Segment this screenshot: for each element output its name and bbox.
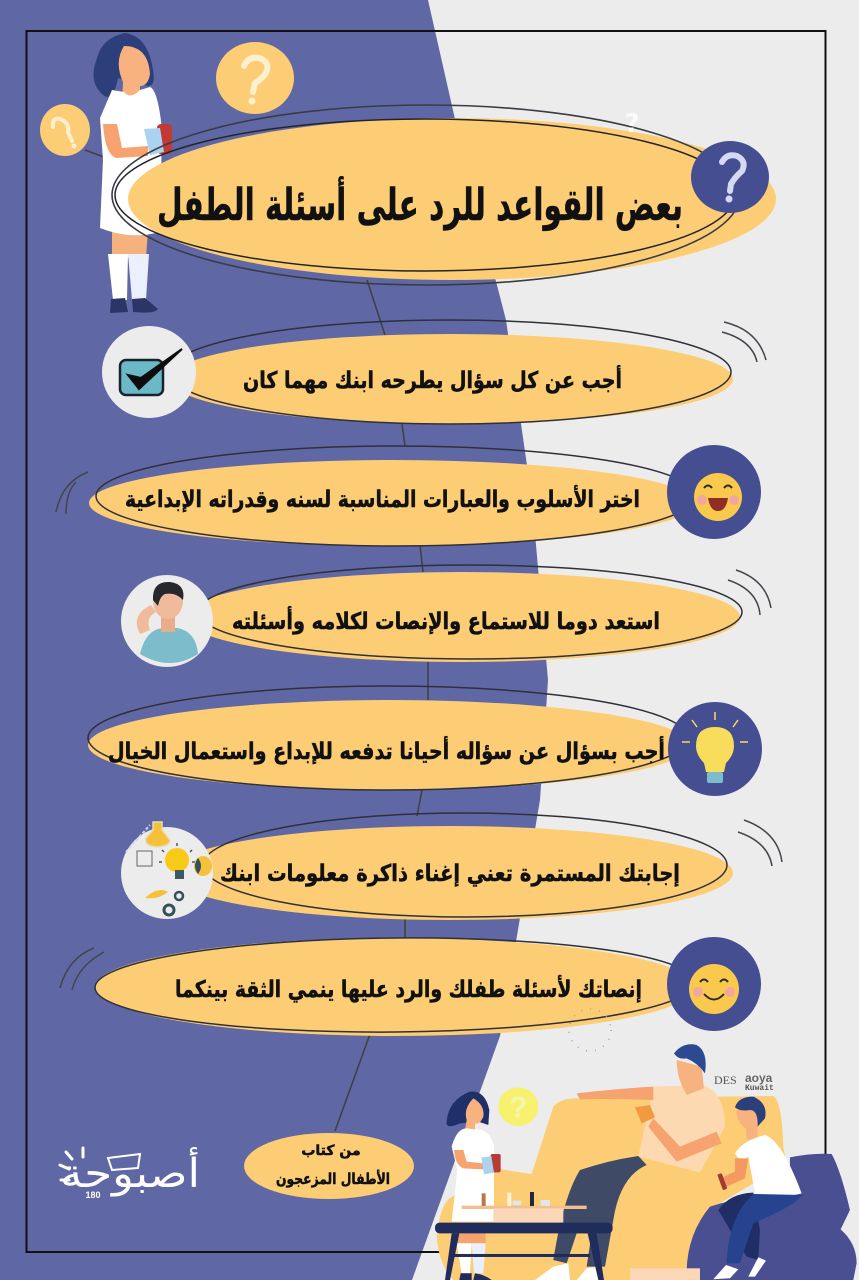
coffee table (435, 1192, 700, 1280)
rule 2 text: اختر الأسلوب والعبارات المناسبة لسنه وقدراته الإبداعية (125, 484, 640, 513)
icon: question bubble purple (691, 141, 769, 213)
sofa (437, 1096, 787, 1280)
armchair (687, 1154, 857, 1280)
source callout: من كتاب (301, 1143, 361, 1159)
source callout: الأطفال المزعجون (276, 1170, 390, 1188)
icon: smiling face (667, 937, 761, 1031)
icon: question bubble small (40, 104, 90, 156)
icon: light bulb (668, 702, 762, 796)
designer credit: Kuwait (745, 1084, 774, 1093)
designer credit: DES (714, 1073, 737, 1087)
connector lines (85, 150, 428, 1131)
rule 6 text: إنصاتك لأسئلة طفلك والرد عليها ينمي الثقة بينكما (175, 974, 642, 1003)
panel: rule 5 (121, 813, 782, 920)
logo: 180 (85, 1190, 101, 1200)
panel: rule 6 (60, 935, 761, 1036)
source callout (244, 1133, 414, 1199)
faint dotted clock (569, 1009, 611, 1051)
icon: question bubble large (216, 42, 294, 114)
illustration: family on sofa (435, 1044, 857, 1280)
rule 5 text: إجابتك المستمرة تعني إغناء ذاكرة معلومات ابنك (220, 861, 680, 887)
father (535, 1044, 725, 1280)
yellow question bubble: ? (509, 1091, 527, 1124)
illustration: standing girl (94, 33, 172, 313)
icon: checkmark (102, 326, 196, 418)
rule 4 text: أجب بسؤال عن سؤاله أحيانا تدفعه للإبداع واستعمال الخيال (108, 735, 665, 765)
icon: faint question mark: ? (624, 109, 640, 139)
title panel (112, 105, 776, 285)
designer credit: aoya (745, 1071, 773, 1085)
panel: rule 1 (102, 320, 766, 424)
panel: rule 3 (121, 565, 771, 667)
yellow question bubble (498, 1087, 538, 1126)
boy (713, 1097, 803, 1279)
icon: science collage (121, 822, 213, 919)
small girl (446, 1092, 501, 1280)
logo: أصبوحة (60, 1147, 200, 1197)
rule 3 text: استعد دوما للاستماع والإنصات لكلامه وأسئلته (232, 605, 660, 635)
panel: rule 2 (56, 445, 761, 546)
designer credit (714, 1071, 774, 1093)
icon: thinking boy (121, 575, 213, 667)
icon: laughing face (667, 445, 761, 539)
panel: rule 4 (88, 686, 762, 796)
rule 1 text: أجب عن كل سؤال يطرحه ابنك مهما كان (243, 364, 622, 394)
